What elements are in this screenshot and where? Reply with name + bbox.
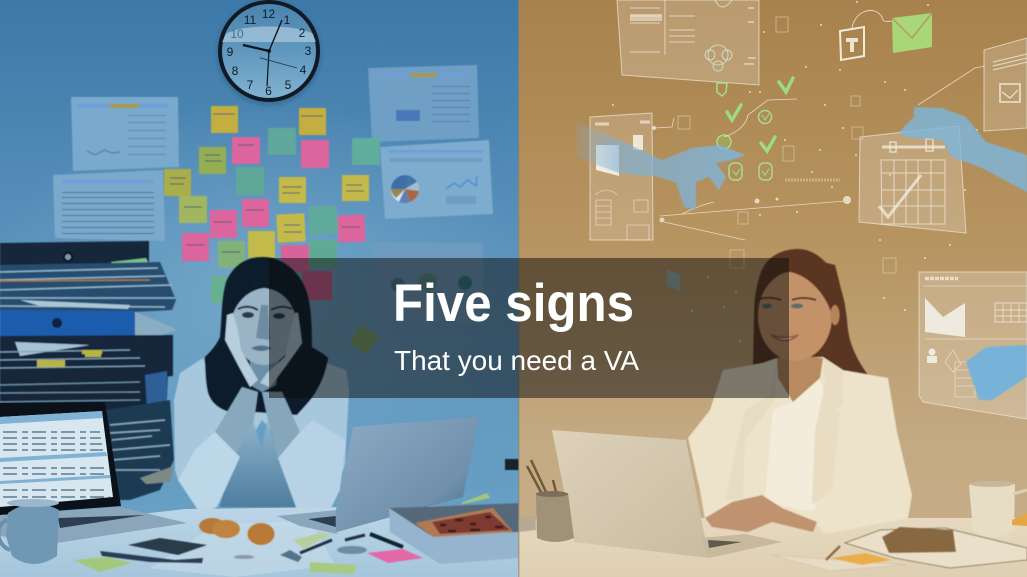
hands [705, 495, 817, 532]
icon: wall clock: 9 [227, 45, 234, 59]
panel: overwhelmed office (left) [0, 0, 530, 577]
pizza box [389, 503, 519, 564]
face [758, 271, 832, 361]
holographic panels [590, 0, 1027, 419]
icon: wall clock: 2 [299, 26, 306, 40]
subheading: That you need a VA [394, 345, 639, 376]
woman: confident worker [688, 249, 912, 534]
hands [225, 313, 258, 387]
panel: assisted office (right) [519, 0, 1027, 577]
icon: wall clock: 1 [284, 13, 291, 27]
sleeves [178, 432, 240, 513]
wall documents [53, 65, 493, 322]
hair [205, 257, 328, 415]
laptop (right) [552, 430, 782, 558]
icon: check marks and shields [717, 78, 793, 180]
icon: holographic left hand [576, 122, 746, 210]
blazer [688, 357, 912, 534]
shirt [765, 378, 826, 510]
laptop: spreadsheet on screen [0, 402, 187, 543]
icon: wall clock: 4 [300, 63, 307, 77]
face [232, 283, 296, 365]
icon: wall clock: 10 [230, 27, 244, 41]
neck [777, 355, 823, 402]
icon: wall clock: 12 [262, 7, 275, 21]
desk (left) [0, 505, 519, 577]
forearms [215, 387, 258, 463]
mug (left) [0, 499, 59, 564]
icon: wall clock: 7 [247, 78, 254, 92]
title banner [269, 258, 789, 398]
icon: holographic right hand [899, 107, 1027, 192]
icon: holographic lower hand [966, 345, 1027, 400]
torso [220, 420, 297, 507]
icon: green envelope [840, 10, 932, 60]
hair [753, 249, 868, 375]
icon: wall clock: 11 [244, 13, 257, 27]
divider strip [518, 0, 520, 577]
mug (right) [969, 481, 1027, 538]
pen cup [527, 460, 574, 542]
lapels [725, 358, 777, 500]
user icon on wall [667, 269, 680, 291]
laptop: back of lid [277, 417, 478, 534]
icon: wall clock [216, 0, 322, 106]
sticky notes wall [164, 106, 380, 354]
icon: wall clock: 8 [232, 64, 239, 78]
shirt body [174, 358, 349, 513]
icon: wall clock: 6 [265, 84, 272, 98]
woman: stressed worker [174, 257, 349, 513]
network lines and particles [612, 1, 985, 342]
desk items: notebook, papers, sticky [519, 516, 1027, 571]
icon: wall clock: 3 [305, 44, 312, 58]
icon: wall clock: 5 [285, 78, 292, 92]
desk (right) [519, 518, 1027, 577]
desk clutter: snacks, phone, pens, notes [73, 459, 519, 574]
heading: Five signs [393, 274, 634, 333]
neck [250, 350, 280, 392]
stack of binders and papers [0, 241, 177, 500]
